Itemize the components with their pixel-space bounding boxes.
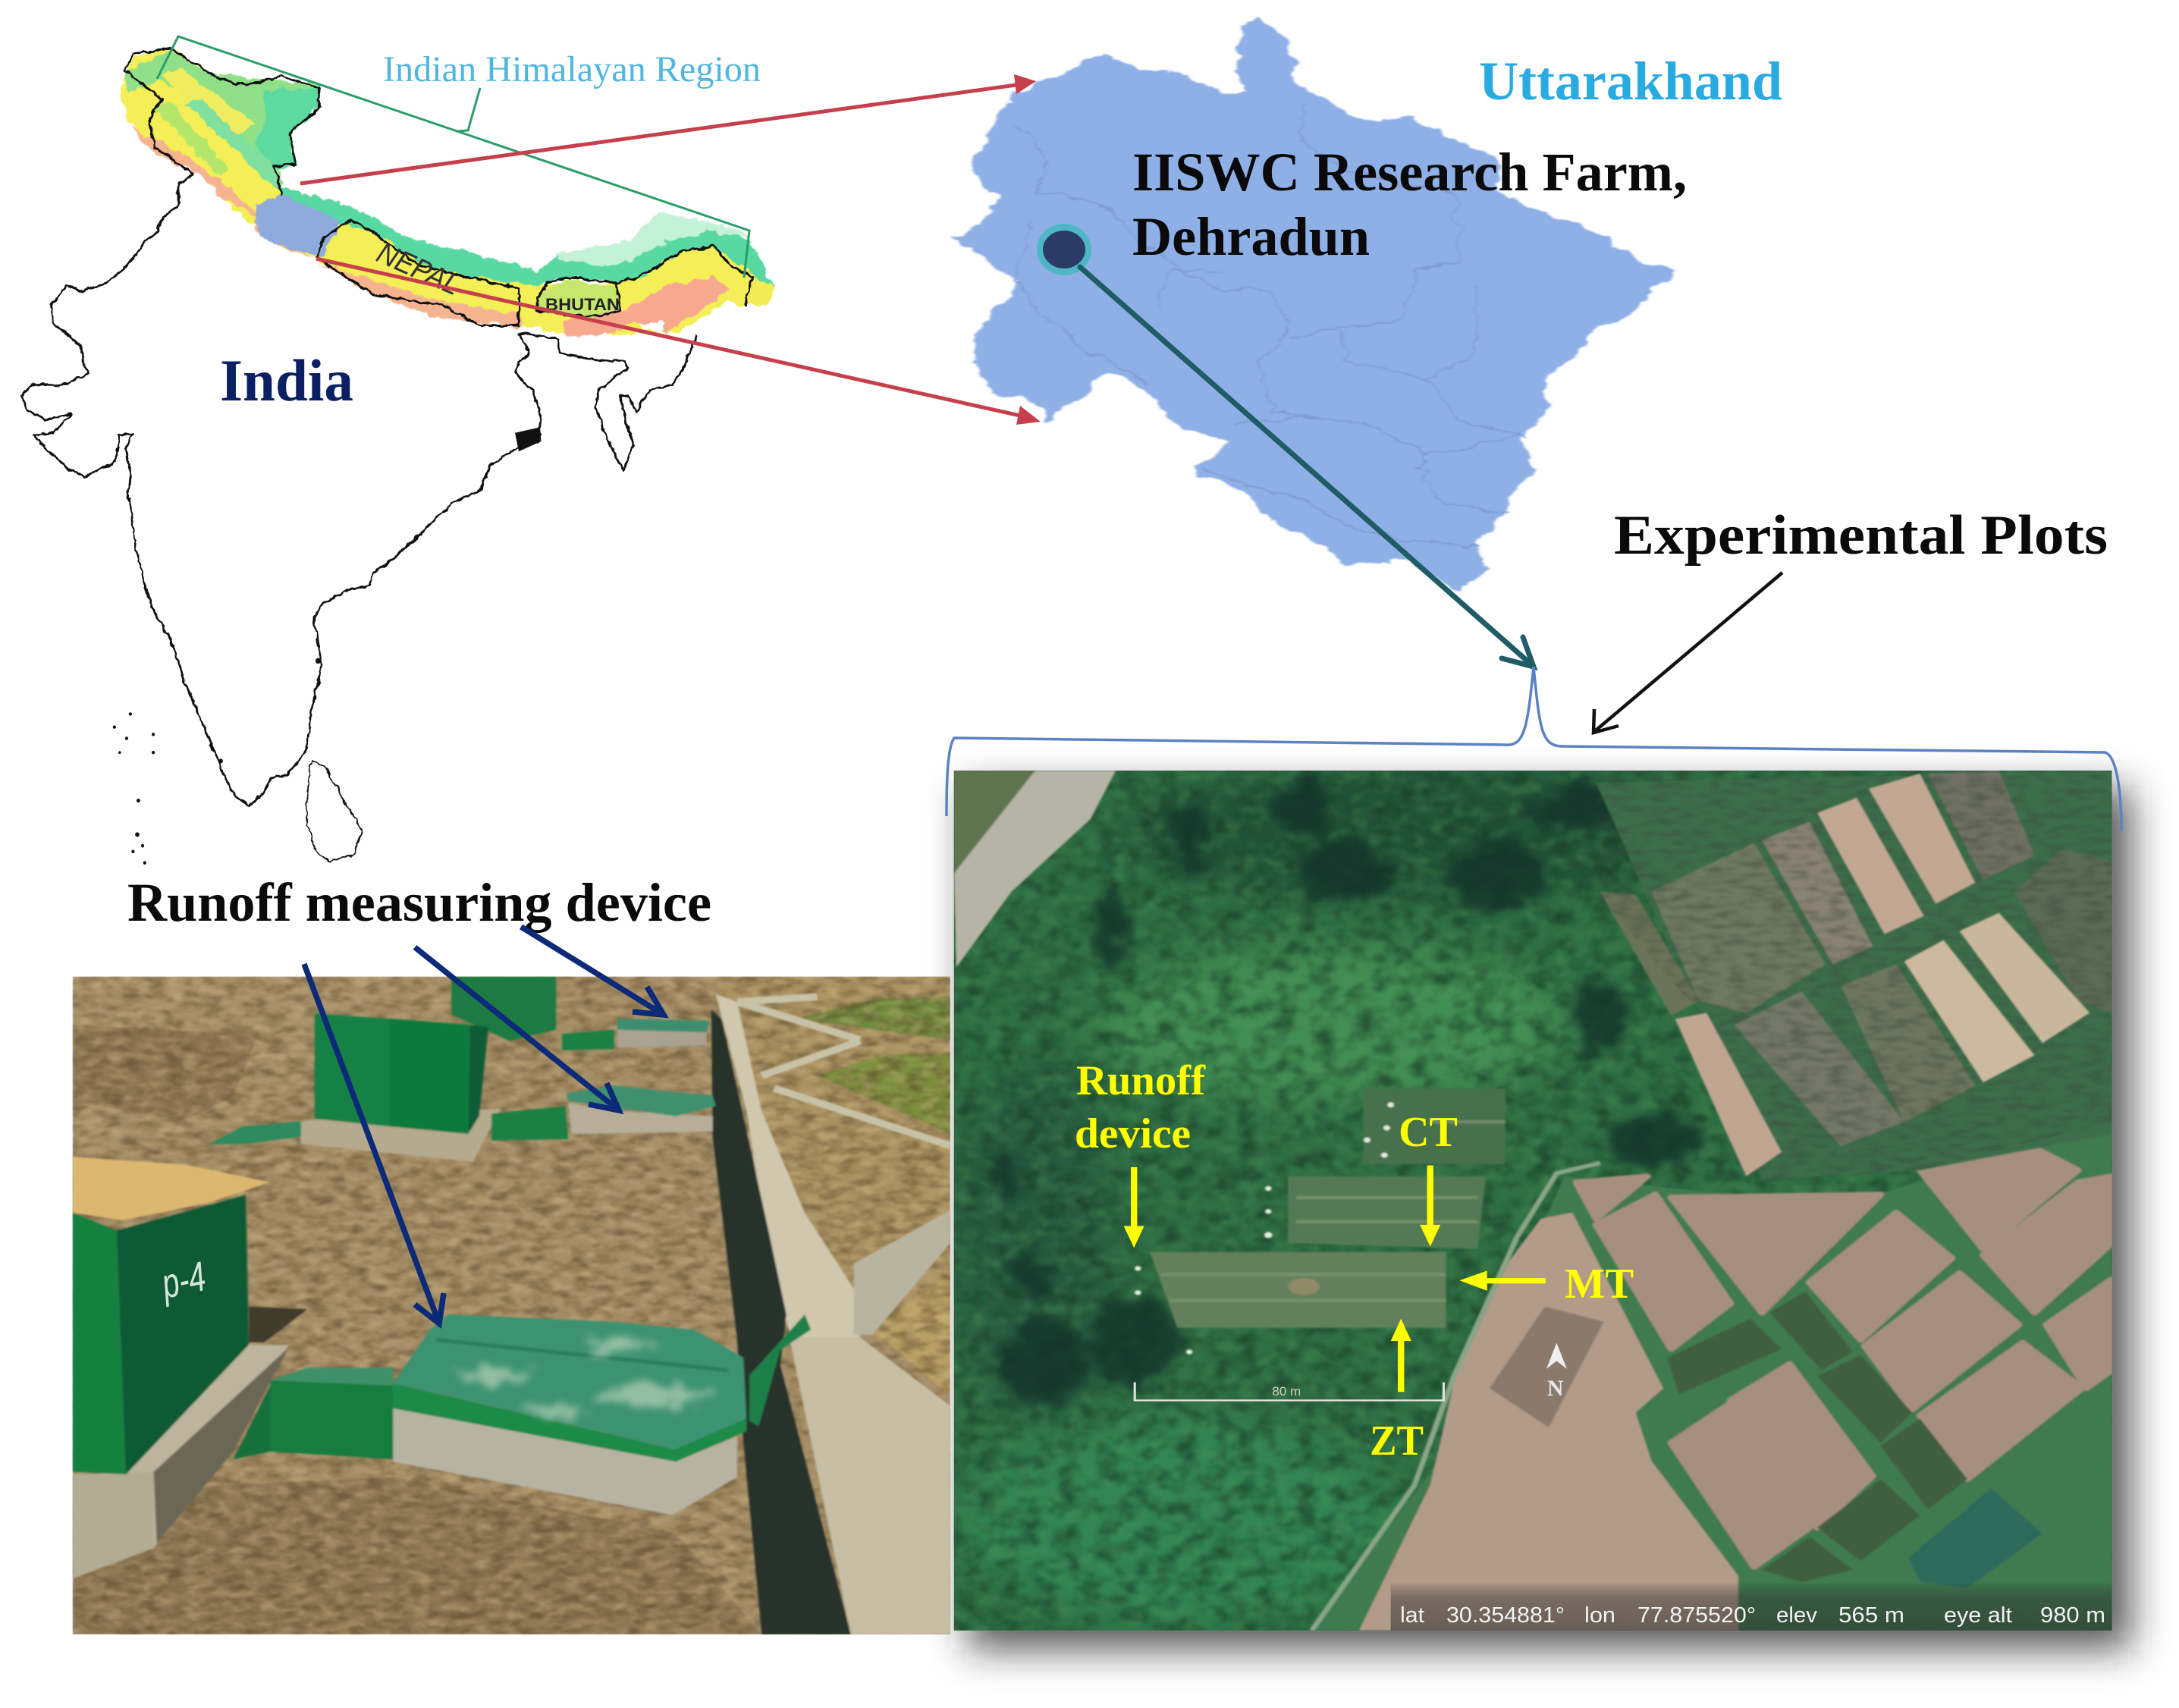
orchard and terraced plots upper right: [1596, 771, 2112, 1179]
arrow: runoff device middle tank: [415, 947, 619, 1110]
status bar readout: lat: [1400, 1603, 1424, 1628]
satellite label: ZT: ZT: [1370, 1418, 1424, 1465]
arrow: runoff device front tank: [304, 964, 444, 1323]
label: Uttarakhand: Uttarakhand: [1479, 51, 1782, 111]
panel: satellite image drop shadow: [967, 789, 2131, 1650]
concrete channel and black liner: [716, 994, 860, 1339]
yellow arrow: ZT: [1391, 1319, 1411, 1392]
satellite label: Runoff device: device: [1075, 1110, 1191, 1157]
panel: satellite image of experimental plots: [954, 765, 2112, 1631]
scale bar 80 m: 80 m: [1272, 1384, 1301, 1399]
arrow: bottom red arrow to Uttarakhand: [316, 259, 1041, 425]
yellow arrow: runoff device: [1124, 1167, 1144, 1248]
map label: NEPAL: NEPAL: [372, 236, 465, 303]
satellite label: CT: CT: [1399, 1109, 1458, 1156]
status bar readout: elev: [1776, 1603, 1818, 1628]
hillside: [73, 976, 454, 1162]
label: Runoff measuring device: Runoff measuring device: [127, 872, 711, 933]
panel: Uttarakhand map: [955, 17, 1675, 593]
status bar readout: [1400, 1603, 2105, 1628]
cultivated field block lower right: [1312, 1116, 2112, 1631]
status bar readout: 30.354881°: [1446, 1603, 1565, 1628]
Himalayan region raster: [120, 48, 774, 335]
arrow: runoff device far tank: [521, 927, 664, 1015]
yellow arrow: CT: [1420, 1166, 1440, 1247]
status bar readout: 565 m: [1838, 1603, 1904, 1628]
box marking p-4: p-4: [156, 1254, 210, 1308]
label: Experimental Plots: Experimental Plots: [1614, 504, 2108, 567]
status bar readout: 980 m: [2040, 1603, 2105, 1628]
coordinate status bar background: [1391, 1584, 2112, 1631]
research farm location marker: [1037, 224, 1091, 275]
label: IISWC Research Farm, Dehradun: IISWC Research Farm,: [1132, 142, 1687, 203]
status bar readout: lon: [1584, 1603, 1615, 1628]
arrow: farm location to experimental plots: [1080, 267, 1534, 667]
India coastline and borders: [22, 48, 753, 861]
road at top left: [954, 771, 1116, 967]
front box: [249, 1307, 307, 1342]
label: Indian Himalayan Region: Indian Himalayan Region: [383, 49, 761, 89]
satellite label: Runoff device: Runoff: [1076, 1057, 1206, 1104]
plots beyond the wall: [716, 976, 950, 1365]
bracket pointer to region label: [457, 88, 480, 131]
panel: India map: [22, 48, 774, 865]
experimental plot strips: [1135, 1088, 1506, 1355]
arrow: top red arrow to Uttarakhand: [300, 74, 1036, 184]
front tank: [393, 1408, 737, 1515]
panel: photo of runoff measuring devices: [73, 976, 950, 1634]
arrow: Experimental Plots pointer: [1593, 573, 1782, 733]
yellow arrow: MT: [1459, 1271, 1546, 1291]
north arrow: [1546, 1343, 1567, 1401]
middle tank: [491, 1106, 568, 1141]
map label: BHUTAN: BHUTAN: [545, 295, 620, 314]
label: India: India: [220, 347, 353, 413]
bracket over satellite image: [947, 667, 2121, 831]
far back box: [451, 976, 556, 1041]
scale bar 80 m: [1135, 1382, 1443, 1400]
label: IISWC Research Farm, Dehradun: Dehradun: [1132, 206, 1370, 267]
status bar readout: eye alt: [1944, 1603, 2012, 1628]
conduit to front tank: [234, 1386, 270, 1459]
bracket: Indian Himalayan Region: [157, 36, 749, 278]
far tank: [562, 1030, 614, 1050]
satellite label: MT: MT: [1565, 1261, 1634, 1308]
Sundarbans delta and islands: [113, 427, 541, 865]
middle box: [298, 1109, 501, 1162]
district boundaries: [1016, 104, 1525, 547]
status bar readout: 77.875520°: [1637, 1603, 1756, 1628]
north arrow: N: [1547, 1376, 1564, 1401]
